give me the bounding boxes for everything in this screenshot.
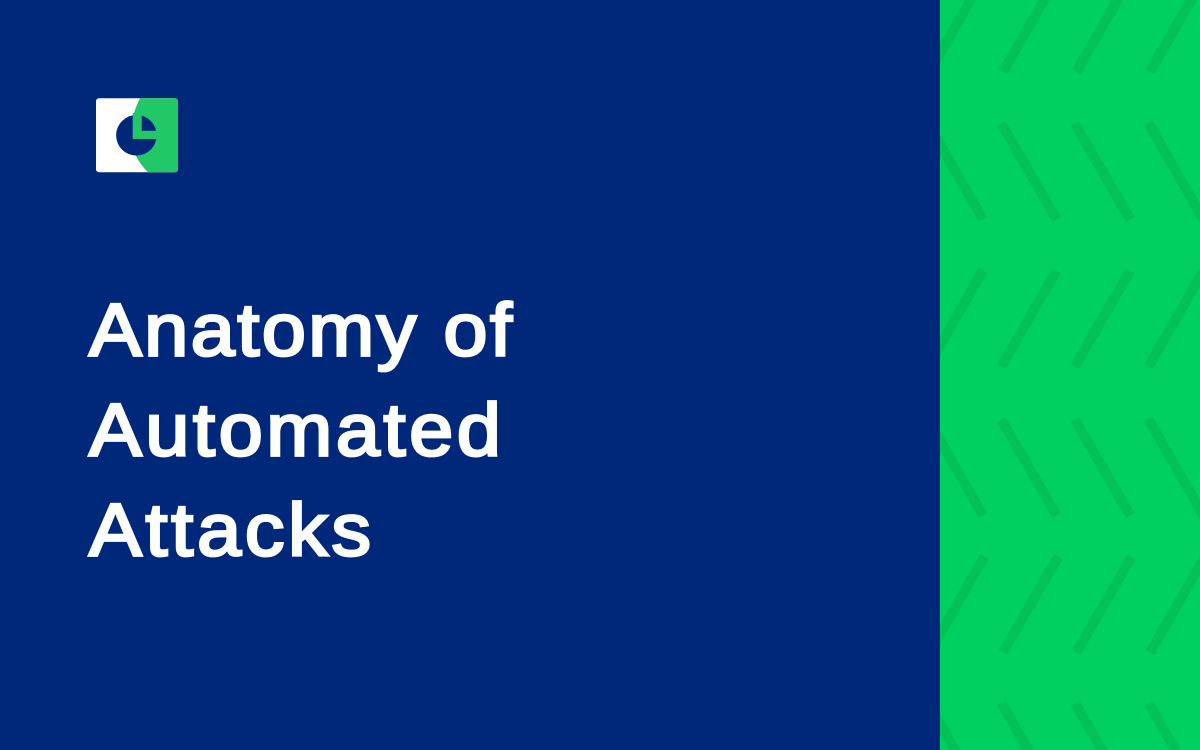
title line 2: Automated bbox=[89, 389, 501, 472]
logo: navy pie circle bbox=[116, 115, 157, 156]
logo bbox=[96, 98, 178, 172]
title line 1: Anatomy of bbox=[89, 289, 513, 372]
logo: green half bbox=[131, 98, 178, 172]
panel: green patterned band bbox=[940, 0, 1200, 750]
panel: navy background bbox=[0, 0, 940, 750]
logo: green pie cut bbox=[133, 113, 158, 139]
logo: white tile bbox=[96, 98, 178, 172]
title bbox=[89, 289, 513, 572]
title line 3: Attacks bbox=[89, 489, 371, 572]
